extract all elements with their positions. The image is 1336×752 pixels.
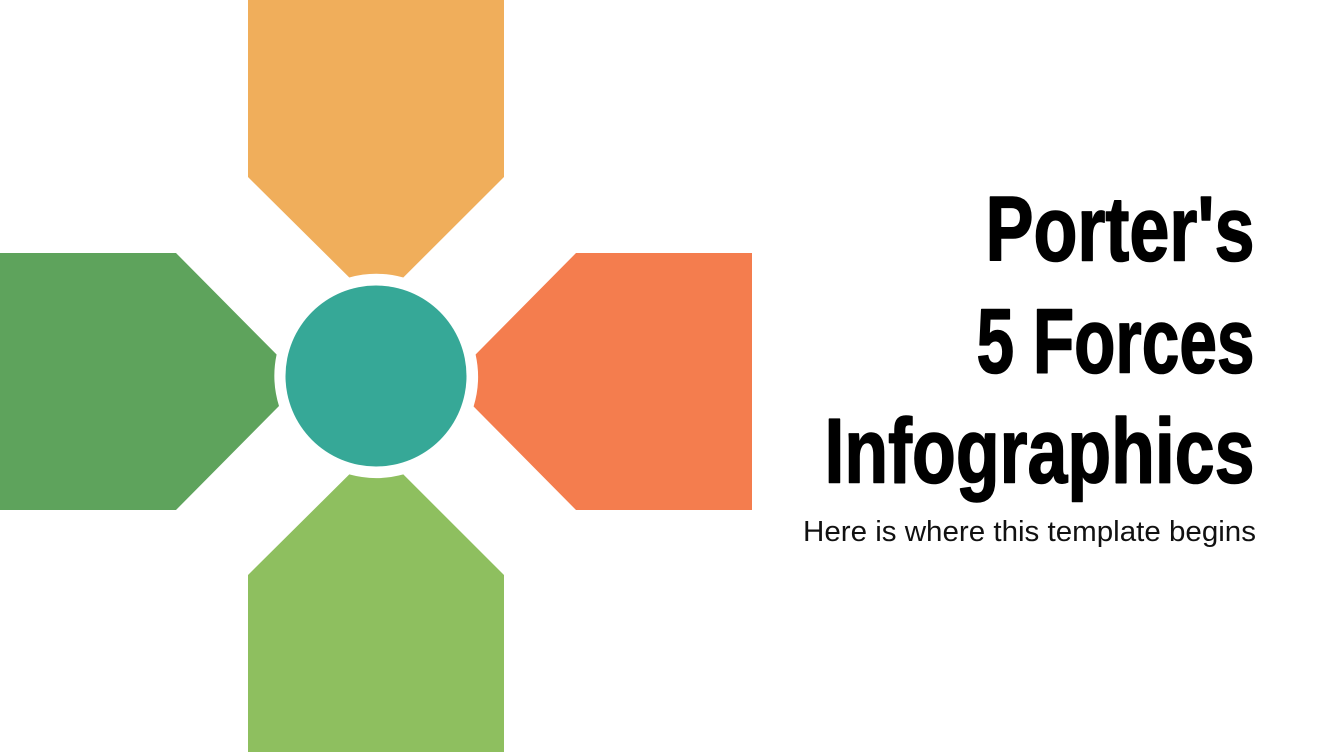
title line 1: Porter's (986, 178, 1254, 280)
arrow panel: top orange (248, 0, 504, 278)
title (824, 178, 1254, 502)
center circle (286, 286, 466, 466)
arrow panel: left dark green (0, 253, 279, 510)
arrow panel: right coral (474, 253, 752, 510)
arrow panel: bottom light green (248, 474, 504, 752)
subtitle: Here is where this template begins (803, 516, 1256, 548)
